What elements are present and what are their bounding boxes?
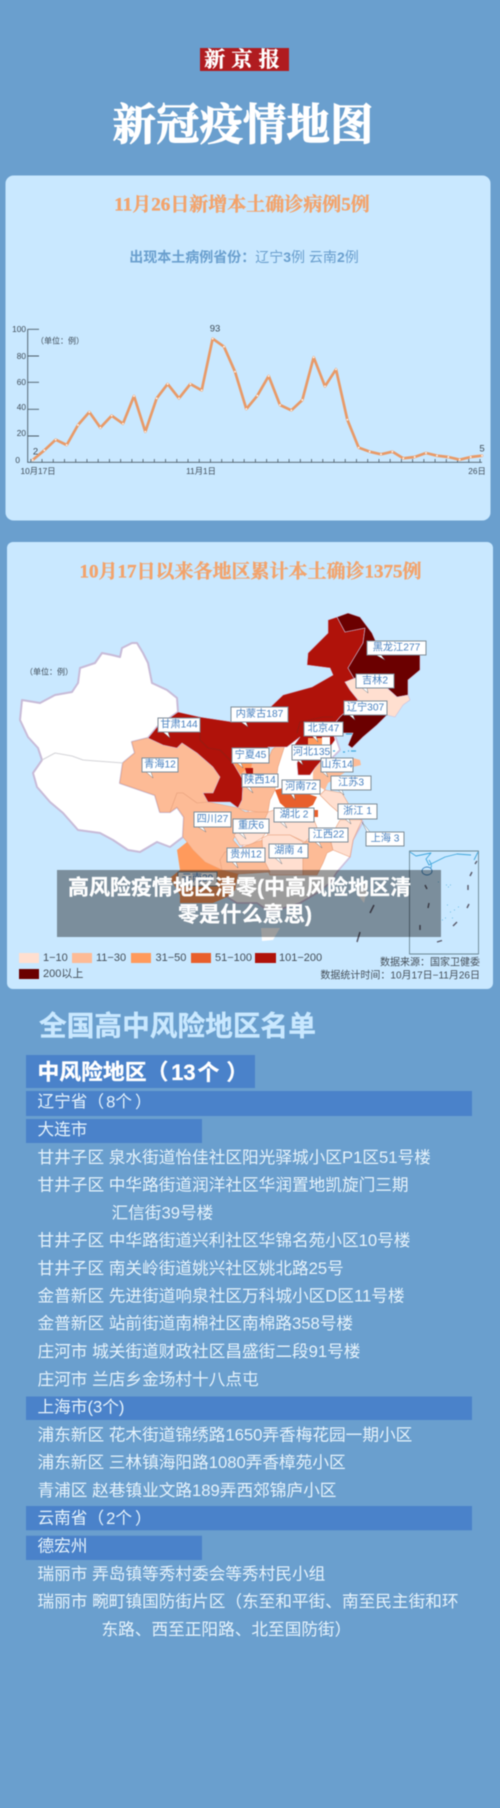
label: 湖南: 湖南 4 [274,844,303,856]
label: 黑龙江: 黑龙江277 [373,640,421,654]
list: Dalian areas: 庄河市 兰店乡金场村十八点屯 [38,1370,259,1389]
label: 江西 [309,828,348,848]
list: Shanghai areas: 青浦区 赵巷镇业文路189弄西郊锦庐小区 [38,1481,336,1500]
label: 湖南 [269,844,308,864]
list: Shanghai areas: 浦东新区 花木街道锦绣路1650弄香梅花园一期小区 [38,1426,412,1444]
line chart: daily cases: 60 [17,377,26,387]
label: 山东: 山东14 [321,758,353,770]
heading: risk area list: 全国高中风险地区名单 [39,1010,316,1042]
section: medium-risk areas [26,1055,472,1639]
line chart: daily cases: 0 [15,455,20,465]
label: 湖北: 湖北 2 [280,808,309,820]
Heilongjiang [337,613,420,697]
legend: 11−30 [96,952,126,964]
panel: cumulative cases map [7,542,493,989]
map base outline [227,735,363,910]
line chart: daily cases: 20 [17,428,26,438]
label: 青海 [142,758,178,778]
band: Dehong [26,1536,202,1560]
label: 辽宁: 辽宁307 [347,700,385,714]
line chart: daily cases [12,324,486,476]
label: 河北 [292,745,331,765]
label: 云南: 云南39 [182,872,214,884]
label: 黑龙江 [367,640,426,660]
Xinjiang and Tibet [20,643,184,852]
label: 北京: 北京47 [308,722,340,734]
Shandong [313,758,361,790]
overlay caption banner: 零是什么意思) [178,902,312,926]
Sichuan [170,793,268,870]
list: Dehong areas: 瑞丽市 畹町镇国防街片区（东至和平街、南至民主街和环 [38,1592,459,1611]
Gansu, Inner Mongolia and Hebei [148,617,365,808]
list: Dalian areas: 汇信街39号楼 [112,1204,213,1222]
label: 宁夏: 宁夏45 [235,748,267,761]
label: 辽宁 [344,700,387,720]
list: Dehong areas [38,1564,459,1639]
band: Liaoning: 辽宁省（8个） [38,1092,152,1111]
Hunan [262,835,303,875]
list: Dalian areas: 甘井子区 中华路街道兴利社区华锦名苑小区10号楼 [38,1231,410,1250]
label: 湖北 [274,808,314,828]
map labels [142,640,426,886]
label: 河南 [282,780,320,800]
legend: 1−10 [43,952,68,964]
label: 贵州: 贵州12 [230,848,262,860]
Chongqing [234,823,268,845]
line chart: daily cases: （单位：例） [36,336,84,346]
list: Dalian areas: 甘井子区 泉水街道怡佳社区阳光驿城小区P1区51号楼 [38,1148,431,1167]
list: Shanghai areas: 浦东新区 三林镇海阳路1080弄香樟苑小区 [38,1453,346,1472]
line chart: daily cases: 40 [17,402,26,412]
overlay caption banner [57,870,441,937]
line chart: daily cases: 100 [12,324,26,334]
label: 四川: 四川27 [197,814,229,825]
text: data source: 数据来源：国家卫健委 [380,956,480,968]
label: 陕西: 陕西14 [244,773,276,786]
band: medium-risk title [26,1055,255,1088]
band: Dalian: 大连市 [38,1120,87,1139]
line chart: daily cases: 26日 [468,466,486,476]
list: Shanghai areas [38,1426,412,1500]
list: Dalian areas: 金普新区 先进街道响泉社区万科城小区D区11号楼 [38,1286,405,1306]
band: Shanghai: 上海市(3个) [38,1398,124,1416]
text: data source: 数据统计时间：10月17日−11月26日 [320,968,480,982]
line chart: daily cases: 10月17日 [20,466,56,476]
Guizhou [220,840,270,874]
Hubei [262,808,318,842]
map: China provinces [20,613,478,954]
Yunnan [170,842,238,903]
label: 青海: 青海12 [144,758,176,770]
list: Dalian areas: 金普新区 站前街道南棉社区南棉路358号楼 [38,1314,353,1333]
text: map unit: （单位：例） [25,666,73,676]
text: data source [320,956,480,982]
line chart: daily cases: 93 [210,324,220,334]
list: Dalian areas: 甘井子区 中华路街道润洋社区华润置地凯旋门三期 [38,1176,409,1194]
heading: cumulative cases: 10月17日以来各地区累计本土确诊1375例 [79,560,422,582]
label: 山东 [321,758,353,777]
legend [19,952,322,980]
label: 甘肃: 甘肃144 [160,718,198,730]
islands [333,734,356,752]
list: Dalian areas: 庄河市 城关街道财政社区昌盛街二段91号楼 [38,1342,360,1361]
inset: South China Sea [410,851,478,954]
legend: 31−50 [156,952,186,964]
Jiangxi [303,840,333,875]
Jilin [345,678,410,717]
label: 宁夏 [232,748,269,768]
band: Liaoning [26,1091,472,1116]
band: Yunnan [26,1506,472,1530]
label: 北京 [304,722,343,742]
Jiangsu [320,790,362,818]
label: 重庆: 重庆6 [238,818,264,832]
label: 江西: 江西22 [313,828,345,840]
label: 江苏: 江苏3 [338,776,364,788]
label: 江苏 [331,776,371,795]
list: Dalian areas: 甘井子区 南关岭街道姚兴社区姚北路25号 [38,1259,344,1278]
list: Dehong areas: 瑞丽市 弄岛镇等秀村委会等秀村民小组 [38,1564,325,1584]
label: 浙江: 浙江 1 [343,805,372,817]
south sea dashes [357,905,374,942]
title: 新冠疫情地图 [112,102,374,150]
band: Dehong: 德宏州 [38,1536,87,1556]
label: 陕西 [242,773,278,793]
panel: daily new cases [6,176,490,520]
Ningxia [233,763,252,775]
band: Yunnan: 云南省（2个） [38,1508,152,1528]
band: medium-risk title: 中风险地区（13个 ） [38,1060,248,1084]
line chart: daily cases: 11月1日 [186,466,216,476]
label: 甘肃 [158,718,200,738]
list: Dehong areas: 东路、西至正阳路、北至国防街） [102,1620,351,1639]
label: 河南: 河南72 [285,780,317,792]
label: 内蒙古: 内蒙古187 [236,707,284,720]
Henan [275,788,317,810]
label: 云南 [178,872,217,886]
label: 浙江 [338,804,377,824]
band: Dalian [26,1119,202,1143]
line chart: daily cases: 5 [479,444,485,454]
label: 上海 [362,822,404,846]
line chart: daily cases: 2 [33,446,38,458]
overlay caption banner: 高风险疫情地区清零(中高风险地区清 [68,876,411,900]
Liaoning [333,700,387,748]
band: Shanghai [26,1396,472,1420]
label: 河北: 河北135 [293,746,331,758]
label: 内蒙古 [231,707,288,727]
legend: 101−200 [279,952,322,964]
list: Dalian areas [38,1148,431,1389]
logo: 新京报: 新京报 [204,48,286,72]
heading: daily new cases: 11月26日新增本土确诊病例5例 [114,192,370,216]
Zhejiang [330,820,362,857]
label: 重庆 [233,818,269,839]
Shaanxi [238,740,285,812]
legend: 51−100 [215,952,252,964]
label: 吉林 [356,674,394,693]
label: 吉林: 吉林2 [362,674,388,686]
line chart: daily cases: 80 [17,351,26,361]
label: 贵州 [227,848,265,868]
Beijing and Tianjin [308,738,322,745]
label: 四川 [194,812,231,832]
Qinghai [120,738,220,812]
text: provinces with cases: 出现本土病例省份：辽宁3例 云南2例 [129,249,359,265]
legend: 200以上 [43,967,83,980]
label: 上海: 上海 3 [371,832,400,844]
